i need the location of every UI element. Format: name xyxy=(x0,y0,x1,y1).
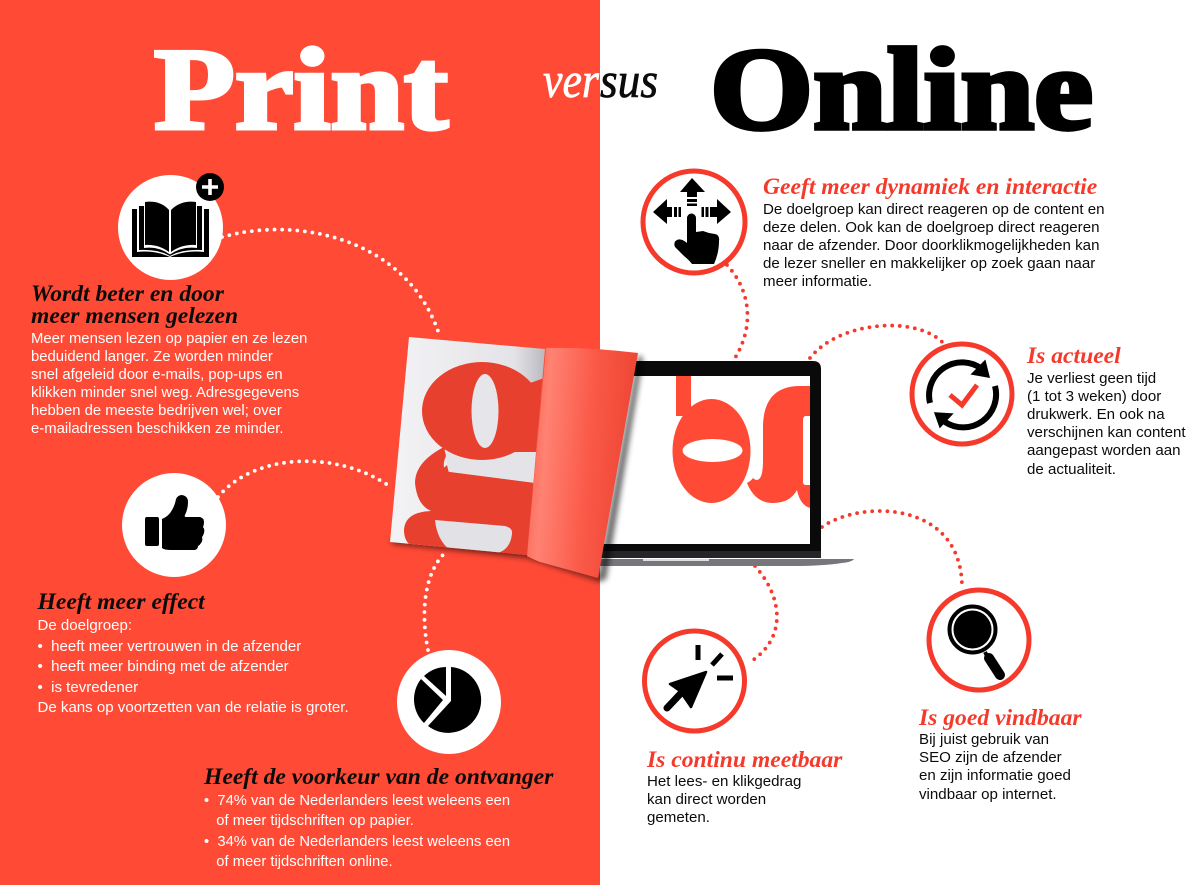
body: vindbaar xyxy=(919,731,1071,803)
heading: meer effect: Heeft meer effect xyxy=(38,589,205,615)
title: Online: Online xyxy=(710,26,1093,154)
text block: vindbaar xyxy=(918,705,1082,803)
body: wordt beter xyxy=(31,330,307,437)
heading: actueel: Is actueel xyxy=(1027,343,1121,369)
body: vindbaar: vindbaar op internet. xyxy=(919,786,1057,803)
body: wordt beter: klikken minder snel weg. Adresgegevens xyxy=(31,385,299,401)
body: meer effect: De kans op voortzetten van de relatie is groter. xyxy=(38,699,349,716)
body: dynamiek: meer informatie. xyxy=(763,273,872,290)
icon: thumbs up xyxy=(122,473,226,577)
body: actueel: (1 tot 3 weken) door xyxy=(1027,388,1161,405)
body: vindbaar: Bij juist gebruik van xyxy=(919,731,1049,748)
body: meer effect xyxy=(38,617,349,716)
body: actueel: aangepast worden aan xyxy=(1027,442,1181,459)
connector: book to magazine xyxy=(222,230,440,337)
title: Print: Print xyxy=(154,26,448,154)
body: dynamiek: deze delen. Ook kan de doelgroep direct reageren xyxy=(763,219,1100,236)
body: wordt beter: beduidend langer. Ze worden minder xyxy=(31,349,273,365)
body: voorkeur: • 34% van de Nederlanders leest weleens een xyxy=(204,834,510,850)
heading: dynamiek: Geeft meer dynamiek en interactie xyxy=(763,174,1097,200)
body: meetbaar: Het lees- en klikgedrag xyxy=(647,772,801,790)
body: dynamiek xyxy=(763,200,1105,290)
body: meetbaar: gemeten. xyxy=(647,809,710,826)
title: versus xyxy=(543,52,658,108)
body: wordt beter: Meer mensen lezen op papier en ze lezen xyxy=(31,330,307,346)
text block: dynamiek xyxy=(763,174,1105,290)
icon: magnifying glass in red ring xyxy=(929,590,1029,690)
text block: actueel xyxy=(1026,343,1186,478)
body: wordt beter: e-mailadressen beschikken ze minder. xyxy=(31,421,283,437)
illustration: laptop xyxy=(600,361,854,566)
body: voorkeur: of meer tijdschriften online. xyxy=(216,854,393,870)
heading: voorkeur: Heeft de voorkeur van de ontvanger xyxy=(204,764,553,790)
illustration: magazine: g xyxy=(415,261,586,570)
body: wordt beter: snel afgeleid door e-mails, pop-ups en xyxy=(31,367,283,383)
body: dynamiek: De doelgroep kan direct reageren op de content en xyxy=(763,200,1105,218)
heading: wordt beter xyxy=(31,281,238,328)
body: voorkeur xyxy=(204,793,510,870)
body: dynamiek: de lezer sneller en makkelijker op zoek gaan naar xyxy=(763,255,1095,272)
text block: wordt beter xyxy=(31,281,307,437)
body: voorkeur: of meer tijdschriften op papier. xyxy=(216,813,414,829)
body: actueel: Je verliest geen tijd xyxy=(1027,370,1156,386)
icon: open book with plus xyxy=(118,173,224,280)
body: meer effect: De doelgroep: xyxy=(38,617,132,634)
connector: thumb to magazine xyxy=(218,461,392,497)
connector: laptop to search xyxy=(822,511,962,585)
text block: meetbaar xyxy=(646,747,842,826)
icon: pie chart xyxy=(397,650,501,754)
title: versus: sus xyxy=(600,52,658,108)
body: actueel xyxy=(1027,370,1186,478)
heading: meetbaar: Is continu meetbaar xyxy=(647,747,842,773)
icon: cursor click in red ring xyxy=(644,631,744,731)
text block: voorkeur xyxy=(204,764,554,870)
body: vindbaar: en zijn informatie goed xyxy=(919,767,1071,784)
connector: hand to laptop xyxy=(727,265,747,358)
text block: meer effect xyxy=(37,589,349,716)
body: meetbaar: kan direct worden xyxy=(647,791,766,808)
body: vindbaar: SEO zijn de afzender xyxy=(919,749,1062,766)
heading: wordt beter: Wordt beter en door xyxy=(31,281,224,307)
connector: laptop to refresh xyxy=(810,326,945,358)
panel: print background xyxy=(0,0,600,885)
body: meer effect: • is tevredener xyxy=(38,678,138,696)
body: meer effect: • heeft meer binding met de afzender xyxy=(38,658,289,675)
heading: vindbaar: Is goed vindbaar xyxy=(919,705,1082,731)
body: meetbaar xyxy=(647,772,801,826)
connector: pie to magazine xyxy=(424,551,447,650)
icon: refresh with check in red ring xyxy=(912,344,1012,444)
body: actueel: verschijnen kan content xyxy=(1027,424,1186,441)
connector: laptop to cursor xyxy=(750,566,777,662)
icon: touch gesture in red ring xyxy=(643,171,745,273)
heading: wordt beter: meer mensen gelezen xyxy=(31,302,238,328)
body: meer effect: • heeft meer vertrouwen in de afzender xyxy=(38,638,301,654)
illustration: magazine xyxy=(388,337,646,585)
body: dynamiek: naar de afzender. Door doorklikmogelijkheden kan xyxy=(763,237,1099,254)
body: actueel: de actualiteit. xyxy=(1027,461,1116,478)
body: actueel: drukwerk. En ook na xyxy=(1027,406,1165,423)
title: versus: ver xyxy=(543,52,599,108)
body: wordt beter: hebben de meeste bedrijven wel; over xyxy=(31,403,282,419)
body: voorkeur: • 74% van de Nederlanders leest weleens een xyxy=(204,793,510,809)
